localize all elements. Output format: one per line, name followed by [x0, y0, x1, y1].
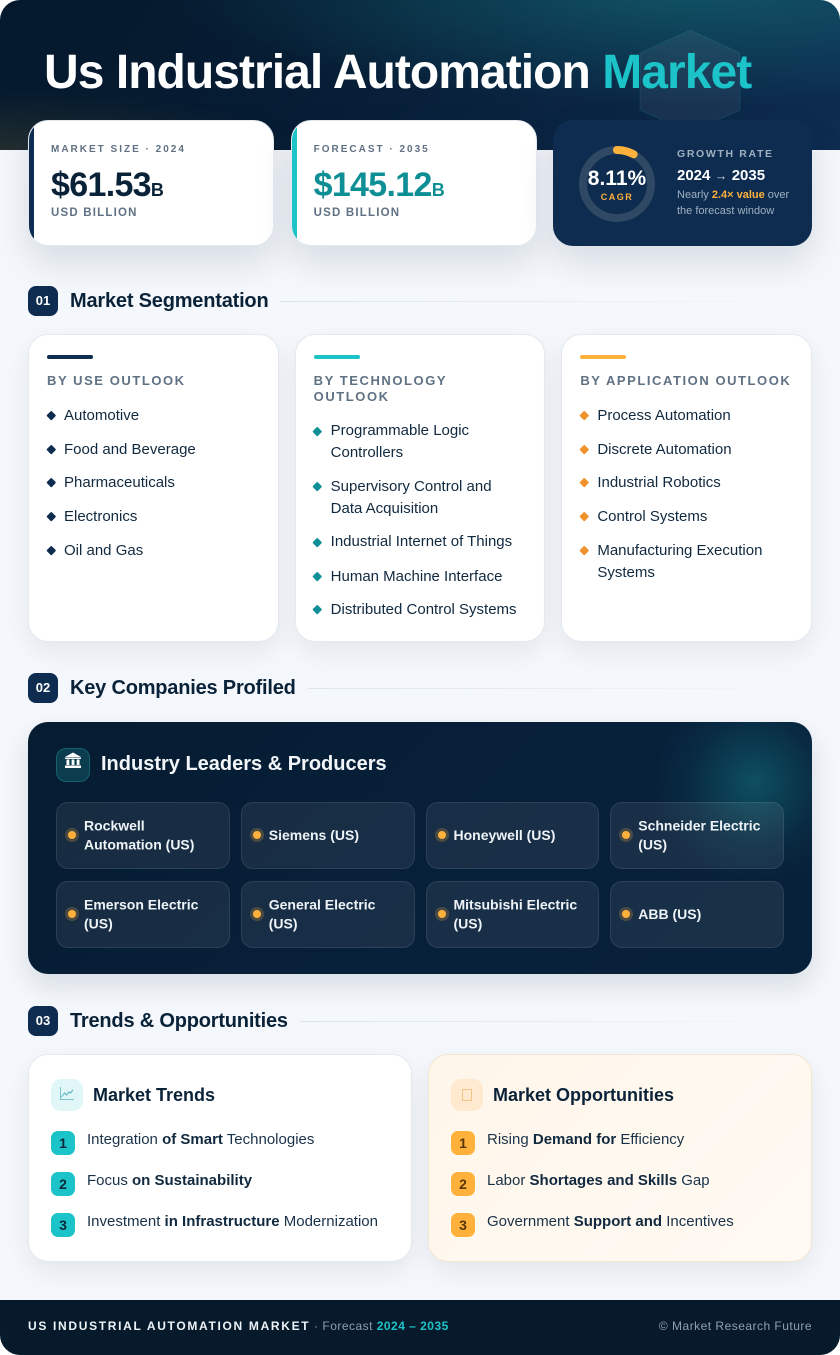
- panel: by technology outlook: Programmable Logic: [331, 422, 469, 439]
- panel: by application outlook: [561, 334, 812, 642]
- heading: Market Opportunities: [493, 1085, 674, 1105]
- footer title: US INDUSTRIAL AUTOMATION MARKET · Forecast 2024 – 2035: [28, 1319, 449, 1333]
- section number 03: 03: [36, 1013, 50, 1028]
- panel: market trends: 3: [59, 1217, 67, 1233]
- panel heading: Industry Leaders & Producers: [101, 753, 387, 775]
- stat card: forecast: $145.12B: [314, 166, 445, 204]
- company: General Electric: General Electric: [269, 896, 375, 912]
- stat card: CAGR: the forecast window: [677, 205, 774, 217]
- section heading: key companies: Key Companies Profiled: [70, 677, 296, 699]
- panel: by use outlook: Electronics: [64, 508, 137, 525]
- section heading: trends: Trends & Opportunities: [70, 1010, 288, 1032]
- stat card: market size: MARKET SIZE · 2024: [51, 144, 186, 155]
- decorative hexagon: [640, 30, 740, 120]
- company: Schneider: (US): [638, 836, 667, 852]
- panel: market trends: [28, 1054, 412, 1262]
- stat card: market size: $61.53B: [51, 166, 164, 204]
- panel: by technology outlook: Distributed Control Systems: [331, 601, 517, 618]
- panel: by application outlook: Industrial Robotics: [597, 474, 721, 491]
- CAGR value: 8.11%: [588, 167, 646, 190]
- stat card: CAGR: 2024 → 2035: [677, 167, 765, 184]
- panel: by technology outlook: Controllers: [331, 444, 403, 461]
- donut chart: [579, 146, 655, 222]
- panel: by use outlook: Pharmaceuticals: [64, 474, 175, 491]
- panel: by application outlook: Control Systems: [597, 508, 707, 525]
- stat card: forecast: USD BILLION: [314, 207, 400, 219]
- panel: market opportunities: Government Support and Incentives: [487, 1213, 734, 1230]
- company: Emerson: Emerson Electric: [84, 896, 198, 912]
- company: Schneider: [610, 802, 784, 868]
- panel: market trends: Integration of Smart Technologies: [87, 1131, 314, 1148]
- panel: by technology outlook: [295, 334, 545, 642]
- panel: market trends: 1: [59, 1135, 67, 1151]
- company: Rockwell: Automation (US): [84, 836, 194, 852]
- panel: market trends: 2: [59, 1176, 67, 1192]
- stat card: forecast: FORECAST · 2035: [314, 144, 430, 155]
- panel: by use outlook: Automotive: [64, 407, 139, 424]
- company: ABB: [610, 880, 784, 948]
- company: General Electric: (US): [269, 915, 298, 931]
- panel: market opportunities: Labor Shortages and Skills Gap: [487, 1172, 710, 1189]
- company: Honeywell: [426, 802, 599, 868]
- company: Emerson: [56, 880, 230, 948]
- panel: by use outlook: [28, 334, 279, 642]
- company: Rockwell: Rockwell: [84, 818, 145, 834]
- company: Siemens: Siemens (US): [269, 827, 359, 843]
- stat card: market size: [28, 120, 274, 246]
- panel: by use outlook: Food and Beverage: [64, 441, 196, 458]
- panel: by use outlook: Oil and Gas: [64, 542, 143, 559]
- footer credit: © Market Research Future: [659, 1319, 812, 1333]
- company: Mitsubishi: (US): [454, 915, 482, 931]
- icon: chart: [51, 1079, 83, 1111]
- section number 02: [28, 673, 58, 703]
- panel: by use outlook: BY USE OUTLOOK: [47, 373, 186, 388]
- company: Schneider: Schneider Electric: [638, 818, 760, 834]
- panel: by application outlook: Systems: [597, 564, 655, 581]
- panel: market opportunities: 2: [459, 1176, 467, 1192]
- title: Us Industrial Automation Market: [44, 46, 751, 99]
- panel: market opportunities: 3: [459, 1217, 467, 1233]
- stat card: market size: USD BILLION: [51, 207, 138, 219]
- panel: market trends: Focus on Sustainability: [87, 1172, 252, 1189]
- CAGR label: CAGR: [601, 192, 633, 202]
- company: Honeywell: Honeywell (US): [454, 827, 555, 843]
- panel: by application outlook: Process Automation: [597, 407, 731, 424]
- header banner: [0, 0, 840, 150]
- section number 01: 01: [36, 293, 50, 308]
- panel: industry leaders: [28, 722, 812, 974]
- panel: market opportunities: 1: [459, 1135, 467, 1151]
- icon: bank: [56, 748, 90, 782]
- panel: by technology outlook: Supervisory Control and: [331, 478, 492, 495]
- icon: missing glyph box: [451, 1079, 483, 1111]
- section number 01: [28, 286, 58, 316]
- panel: market opportunities: Rising Demand for Efficiency: [487, 1131, 684, 1148]
- heading: Market Trends: [93, 1085, 215, 1105]
- growth text: GROWTH RATE: [677, 148, 774, 160]
- company: ABB: ABB (US): [638, 906, 701, 922]
- section heading: market segmentation: Market Segmentation: [70, 290, 268, 312]
- panel: by application outlook: BY APPLICATION OUTLOOK: [580, 373, 791, 388]
- company: General Electric: [241, 880, 414, 948]
- stat card: forecast: [291, 120, 537, 246]
- panel: by technology outlook: BY TECHNOLOGY OUTLOOK: [314, 373, 447, 404]
- company: Rockwell: [56, 802, 230, 868]
- panel: by technology outlook: Industrial Internet of Things: [331, 533, 512, 550]
- footer: [0, 1300, 840, 1355]
- panel: by application outlook: Discrete Automation: [597, 441, 732, 458]
- panel: market trends: Investment in Infrastructure Modernization: [87, 1213, 378, 1230]
- panel: market opportunities: [428, 1054, 812, 1262]
- stat card: CAGR: [553, 120, 812, 246]
- section number 03: [28, 1006, 58, 1036]
- panel: by application outlook: Manufacturing Execution: [597, 542, 762, 559]
- company: Siemens: [241, 802, 414, 868]
- company: Emerson: (US): [84, 915, 113, 931]
- panel: by technology outlook: Human Machine Interface: [331, 568, 502, 585]
- panel: by technology outlook: Data Acquisition: [331, 500, 438, 517]
- company: Mitsubishi: [426, 880, 599, 948]
- stat card: CAGR: Nearly 2.4× value over: [677, 189, 789, 201]
- company: Mitsubishi: Mitsubishi Electric: [454, 896, 577, 912]
- section number 02: 02: [36, 680, 50, 695]
